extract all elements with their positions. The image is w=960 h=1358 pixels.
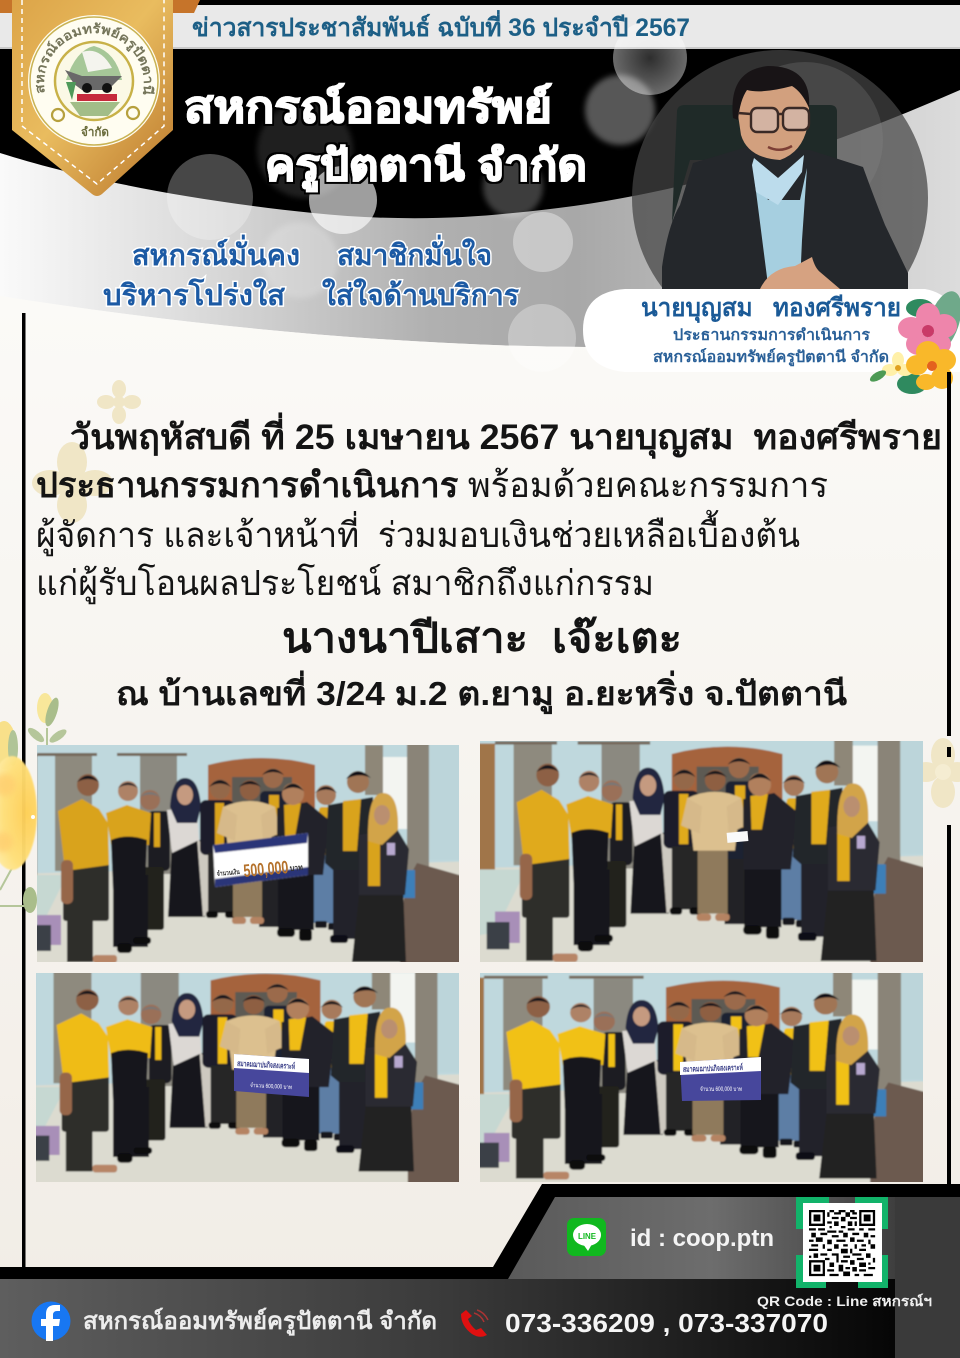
gold ribbon logo tag (0, 0, 200, 196)
photo 4: welfare board (480, 973, 923, 1182)
envelope (727, 831, 748, 843)
icon: line (567, 1218, 606, 1256)
seal sub text: จำกัด (81, 125, 109, 139)
announcement text (36, 412, 942, 715)
line 1: วันพฤหัสบดี ที่ 25 เมษายน 2567 นายบุญสม ทองศรีพราย (70, 412, 942, 459)
hands (760, 257, 840, 289)
chairman name: นายบุญสม ทองศรีพราย (641, 294, 901, 324)
portrait: chairman (632, 50, 928, 346)
line 2: ประธานกรรมการดำเนินการ พร้อมด้วยคณะกรรมการ (36, 466, 828, 505)
bokeh circles (167, 21, 687, 372)
organisation line: สหกรณ์ออมทรัพย์ครูปัตตานี จำกัด (653, 348, 889, 368)
board text: จำนวนเงิน (216, 868, 240, 878)
address: ณ บ้านเลขที่ 3/24 ม.2 ต.ยามู อ.ยะหริ่ง จ.ปัตตานี (116, 670, 847, 715)
yellow buds and leaves left (0, 693, 68, 913)
title (184, 83, 587, 192)
slogans: สหกรณ์มั่นคง (132, 234, 300, 272)
phone numbers: 073-336209 , 073-337070 (505, 1308, 828, 1338)
jacket (662, 147, 908, 289)
name pill (583, 289, 960, 372)
board amount: 500,000 (243, 857, 289, 881)
slogans: สมาชิกมั่นใจ (337, 234, 492, 272)
welfare sign: สมาคมฌาปนกิจสงเคราะห์ (237, 1058, 295, 1071)
newsletter issue heading: ข่าวสารประชาสัมพันธ์ ฉบับที่ 36 ประจำปี 2567 (192, 10, 690, 42)
board unit: บาท (289, 863, 303, 873)
recipient name: นางนาปีเสาะ เจ๊ะเตะ (282, 615, 682, 661)
head (737, 70, 809, 160)
slogans: บริหารโปร่งใส (103, 277, 285, 312)
glasses (738, 108, 809, 132)
photo 2: cheque handover (480, 741, 923, 962)
line 3: ผู้จัดการ และเจ้าหน้าที่ ร่วมมอบเงินช่วยเหลือเบื้องต้น (36, 509, 800, 556)
icon: line: LINE (578, 1231, 596, 1241)
photo 1: 500,000 baht handover (37, 745, 459, 962)
qr code (796, 1197, 888, 1288)
icon: phone (461, 1310, 488, 1337)
office chair (672, 105, 837, 222)
facebook page name: สหกรณ์ออมทรัพย์ครูปัตตานี จำกัด (83, 1307, 437, 1336)
photo 3: welfare board (36, 973, 459, 1182)
line contact panel (508, 1197, 960, 1358)
chairman position: ประธานกรรมการดำเนินการ (673, 326, 871, 344)
title: ครูปัตตานี จำกัด (265, 142, 587, 192)
welfare sign: สมาคมฌาปนกิจสงเคราะห์ (683, 1062, 743, 1074)
yellow flower overlapping frame line (0, 756, 37, 870)
slogans (103, 234, 519, 312)
title: สหกรณ์ออมทรัพย์ (184, 83, 552, 132)
line id: id : coop.ptn (630, 1225, 774, 1252)
cooperative seal (28, 15, 160, 147)
vertical frame lines (22, 313, 951, 1268)
thai ornaments (32, 380, 960, 808)
welfare sign: จำนวน 600,000 บาท (250, 1082, 292, 1091)
welfare sign (680, 1057, 761, 1101)
line 4: แก่ผู้รับโอนผลประโยชน์ สมาชิกถึงแก่กรรม (36, 563, 654, 604)
tropical flowers (868, 287, 960, 394)
seal text: สหกรณ์ออมทรัพย์ครูปัตตานี (36, 22, 155, 94)
qr caption: QR Code : Line สหกรณ์ฯ (757, 1293, 932, 1309)
footer frame: black bars and diagonal (0, 1184, 960, 1279)
welfare sign: จำนวน 600,000 บาท (700, 1086, 742, 1093)
facebook and phone bar (0, 1279, 895, 1358)
header background: black band and swoosh (0, 0, 960, 400)
right edge panel (895, 1197, 960, 1358)
shirt (753, 168, 807, 285)
welfare sign (234, 1054, 309, 1097)
icon: facebook (32, 1302, 70, 1341)
slogans: ใส่ใจด้านบริการ (322, 278, 519, 312)
